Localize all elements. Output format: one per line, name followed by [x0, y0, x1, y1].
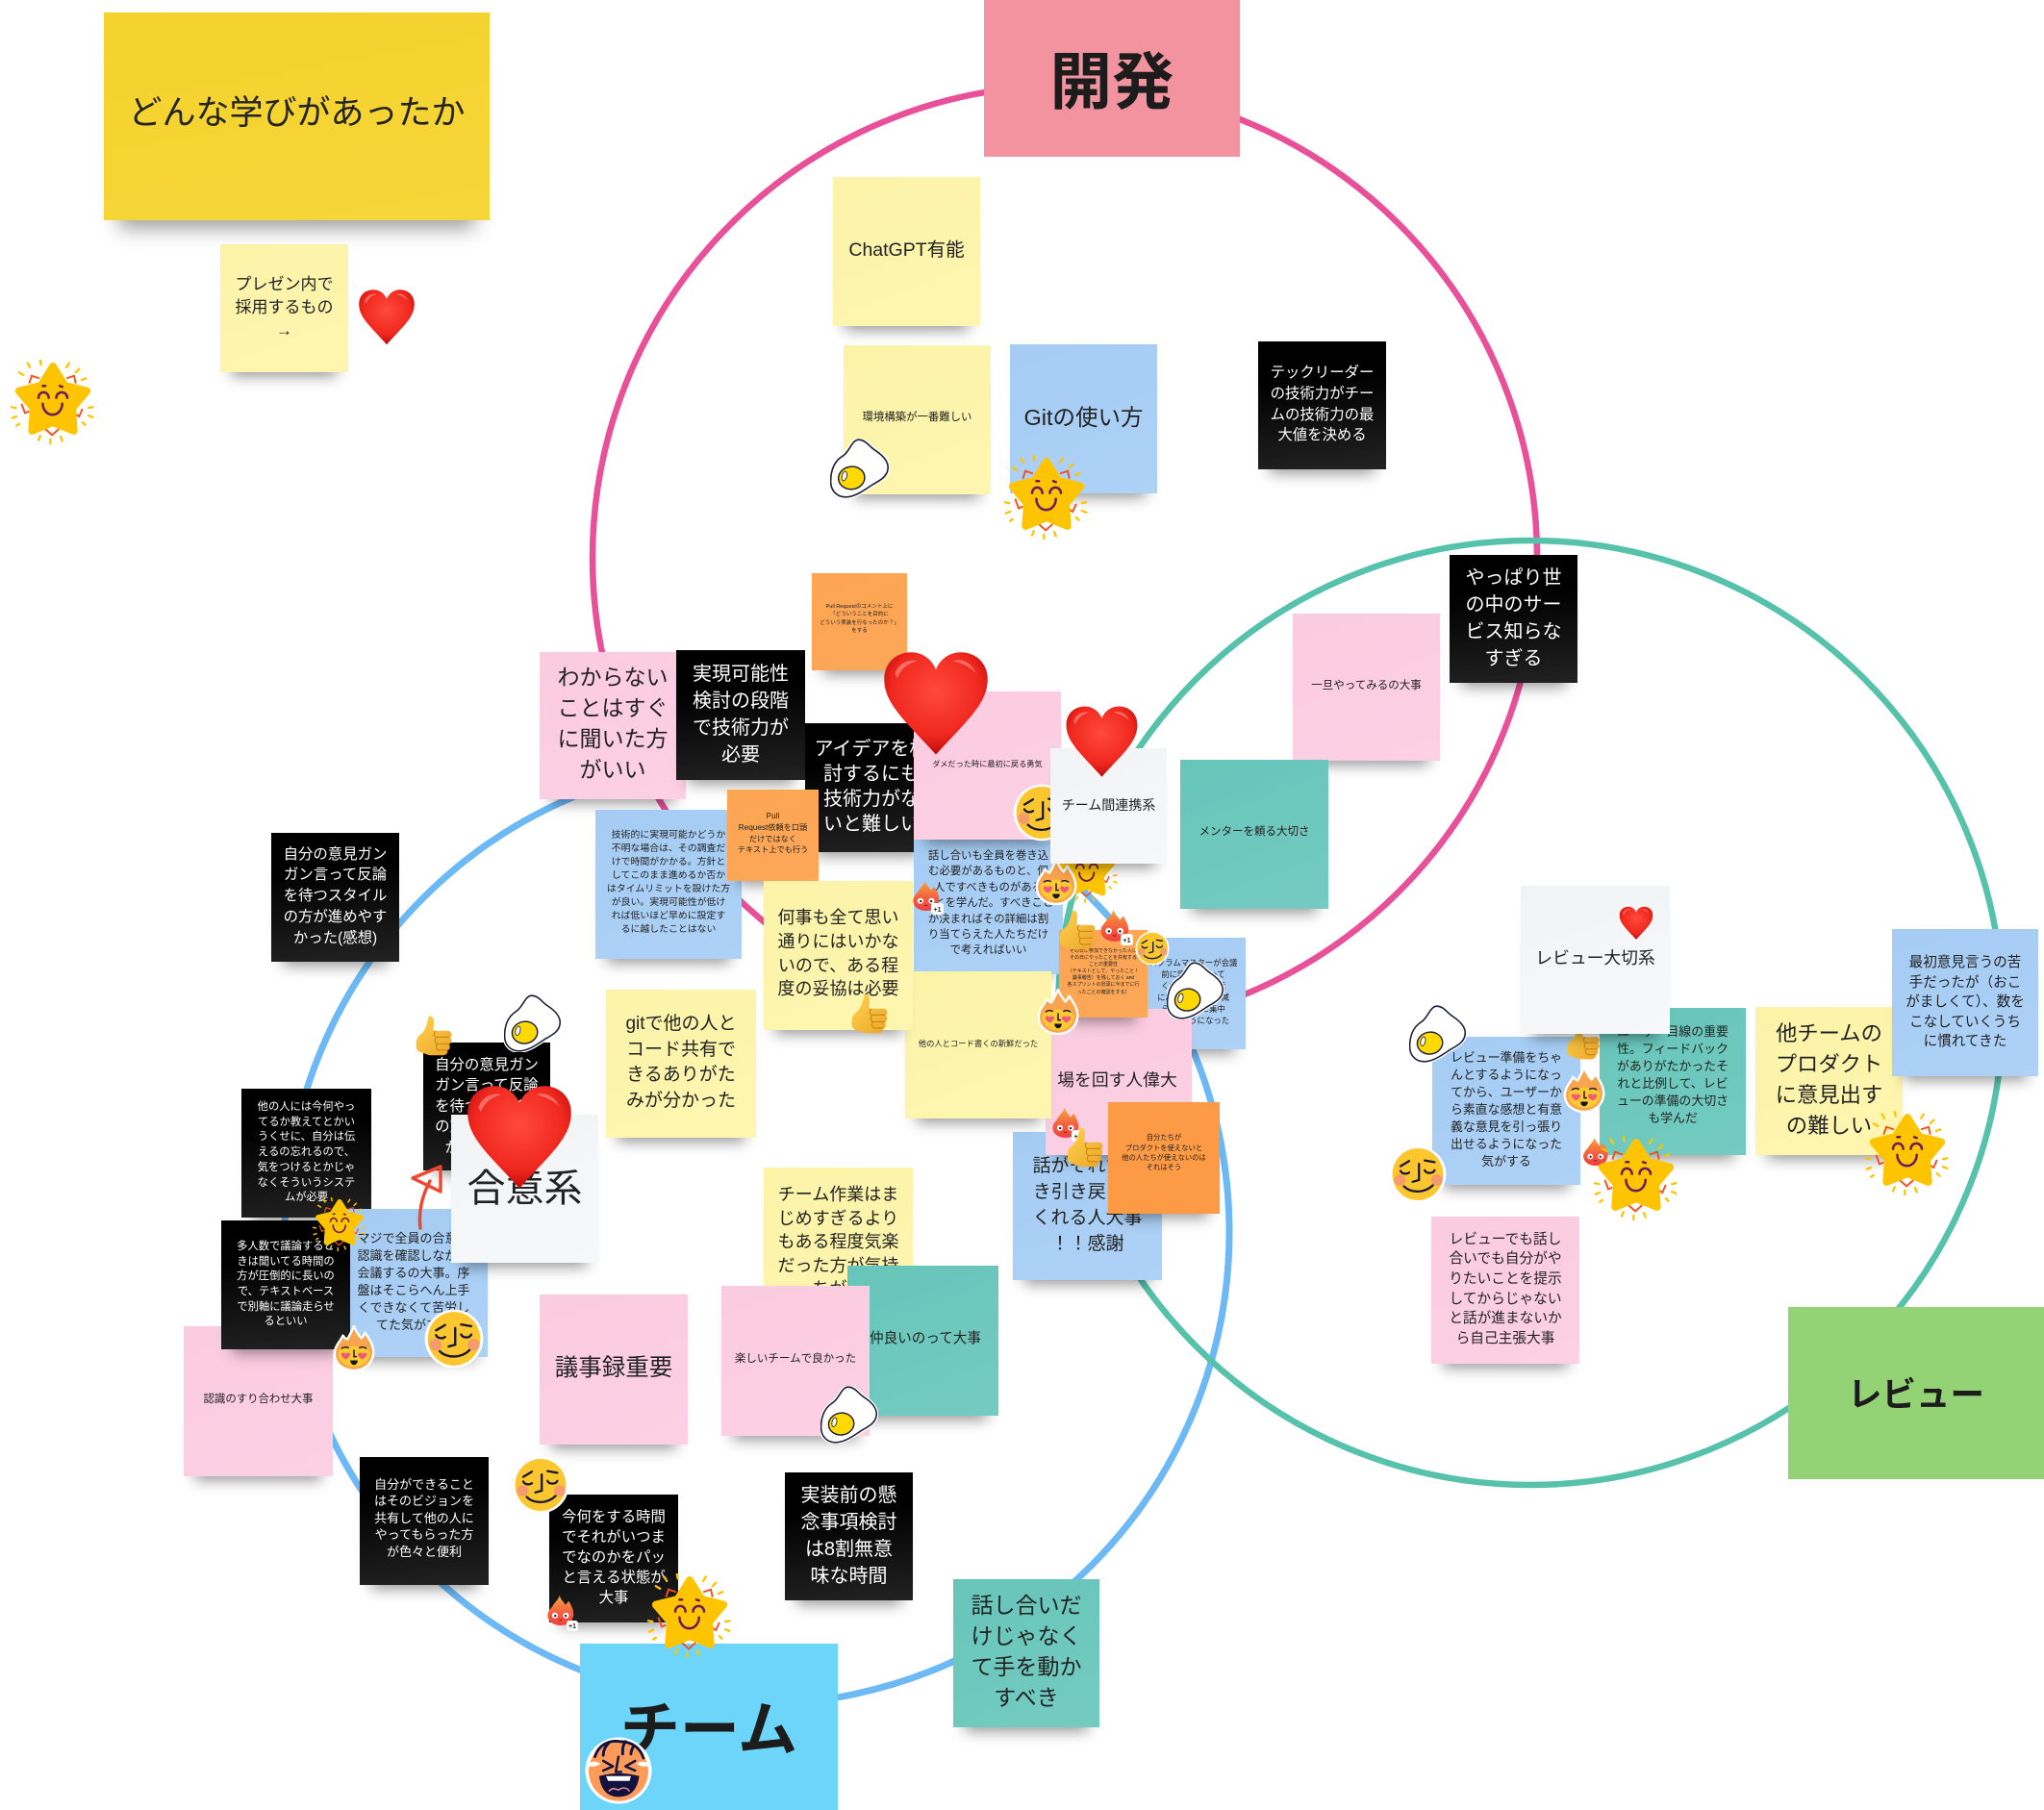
note: 最初意見言うの: がましくて）、数を: [1905, 994, 2025, 1010]
note: その日に参加: 議事報告）を残しておく and: [1072, 975, 1134, 981]
title: [104, 13, 490, 220]
note: 他の人には今何: 気をつけるとかじゃ: [258, 1162, 355, 1173]
note: 実装前の懸念: は8割無意: [805, 1539, 893, 1560]
note: やっぱり世の中: やっぱり世: [1466, 567, 1562, 589]
note: 話し合いだけ: [953, 1579, 1099, 1727]
note: 多人数で議論: 方が圧倒的に長いの: [237, 1270, 335, 1282]
icon: star: [1865, 1111, 1949, 1195]
note: チーム作業: もある程度気楽: [777, 1232, 898, 1251]
note: チーム作業: だった方が気持: [777, 1256, 898, 1275]
icon: egg: [1167, 962, 1224, 1019]
note: 他の人には今何: なくそういうシステ: [258, 1177, 355, 1189]
note: ユーザー目線: 性。フィードバック: [1617, 1041, 1729, 1056]
note: テックリーダー: テックリーダー: [1271, 365, 1374, 381]
note: 他の人には今何: ムが必要: [285, 1192, 328, 1203]
note: 一旦やってみる: 一旦やってみるの大事: [1311, 680, 1422, 691]
icon: fire +1: +1: [934, 907, 942, 914]
note: メンターを頼る: メンターを頼る大切さ: [1199, 826, 1310, 838]
note: gitで他の人と: きるありがた: [626, 1065, 736, 1085]
note: マジで全員の合意: 会議するの大事。序: [357, 1266, 469, 1280]
note: その日に参加: （テキストとして、やったこと！: [1068, 968, 1139, 974]
note: 環境構築: 環境構築が一番難しい: [863, 412, 972, 423]
note: スクラムマスター: スクラムマスターが会議: [1149, 958, 1237, 968]
icon: heart: [1620, 906, 1653, 940]
note: 多人数で議論: で、テキストベース: [238, 1286, 334, 1297]
icon: fire +1: [1100, 910, 1133, 945]
note: レビューでも話し合い: 合いでも自分がや: [1449, 1251, 1562, 1267]
icon: laughing face: [585, 1737, 652, 1804]
note: 認識のすり合わせ: [184, 1326, 333, 1476]
note: チーム作業: ちが楽: [812, 1279, 864, 1298]
icon: sleepy face: [425, 1310, 483, 1368]
note: 合意系: 合意系: [467, 1168, 583, 1210]
note: テックリーダー: 大値を決める: [1277, 427, 1367, 443]
label: チーム: チーム: [620, 1697, 797, 1764]
note: ダメだった時: ダメだった時に最初に戻る勇気: [932, 760, 1043, 768]
note: スクラムマスター: においても無駄を減: [1157, 993, 1229, 1002]
note: 楽しいチーム: 楽しいチームで良かった: [735, 1353, 856, 1365]
note: 自分の意見ガンガン 下: [423, 1043, 550, 1170]
note: レビュー準備: 気がする: [1481, 1154, 1531, 1169]
note: レビュー準備: てから、ユーザーか: [1451, 1085, 1562, 1099]
note: その日に参加: 各スプリントの冒頭に今までに行: [1067, 982, 1139, 988]
icon: egg: [820, 1386, 878, 1444]
note: アイデアを検討: いと難しい: [823, 814, 920, 835]
note: レビューでも話し合い: と話が進まないか: [1449, 1311, 1562, 1326]
note: 他の人には今何: てるか教えてとかい: [258, 1117, 355, 1128]
note: 話し合いだけ: けじゃなく: [972, 1623, 1081, 1648]
note: 話し合いも全員: が決まればその詳細は割: [928, 914, 1048, 925]
note: その日に参加: [1059, 930, 1148, 1018]
note: レビュー大切系: レビュー大切系: [1535, 948, 1655, 968]
note: Pull Request依頼: [727, 790, 819, 881]
note: PRコメント: [812, 573, 907, 670]
note: 自分の意見ガンガン 上: かった(感想): [293, 930, 377, 946]
note: マジで全員の合意: 盤はそこらへん上手: [357, 1283, 469, 1297]
note: 何事も全て: 通りにはいかな: [777, 932, 898, 951]
icon: fire +1: [913, 881, 944, 915]
icon: thumbs up: [1567, 1034, 1600, 1060]
icon: heart: [1066, 706, 1137, 777]
icon: sleepy face: [1014, 785, 1050, 841]
note: 他の人には今何: えるの忘れるので、: [258, 1146, 355, 1158]
note: 話し合いも全員: り当てらえた人たちだけ: [928, 929, 1048, 941]
note: 技術的に実現可能か: 技術的に実現可能かどうか: [612, 830, 725, 841]
note: その日に参加: その日に参加できなかった人に: [1070, 948, 1137, 954]
note: PRコメント: をする: [851, 628, 868, 634]
icon: sleepy face: [1393, 1148, 1447, 1200]
note: レビューでも話し合い: してからじゃない: [1449, 1291, 1562, 1306]
note: プレゼン内で採用するもの: [220, 244, 348, 372]
label: チーム: [580, 1644, 838, 1810]
note: 話がそれた時: [1013, 1132, 1162, 1280]
icon: sleepy face: [516, 1459, 568, 1512]
note: プレゼン内で採用するもの: プレゼン内で: [235, 275, 333, 293]
note: 他の人には今何: 他の人には今何やっ: [258, 1101, 355, 1113]
note: 自分ができること: 自分ができること: [374, 1477, 474, 1492]
icon: egg: [830, 439, 890, 498]
note: 話し合いも全員: む必要があるものと、個: [928, 866, 1048, 877]
icon: fire face: [1037, 989, 1079, 1035]
note: ChatGPT有能: [833, 177, 980, 326]
note: 実装前の懸念: [785, 1472, 913, 1600]
note: 場を回す人偉大: 場を回す人偉大: [1057, 1070, 1177, 1090]
note: ユーザー目線: ユーザー目線の重要: [1617, 1023, 1729, 1039]
note: 他の人には今何: [241, 1089, 371, 1218]
note: ユーザー目線: も学んだ: [1648, 1110, 1698, 1125]
note: 仲良いのって大事: [847, 1266, 998, 1416]
note: 実現可能性: 必要: [721, 744, 760, 766]
note: 今何をする時間: [549, 1495, 678, 1622]
note: テックリーダー: ムの技術力の最: [1271, 406, 1374, 423]
note: レビューでも話し合い: ら自己主張大事: [1456, 1331, 1554, 1346]
note: わからないこと: に聞いた方: [558, 726, 668, 751]
icon: star: [313, 1197, 366, 1251]
note: やっぱり世の中: ビス知らな: [1466, 621, 1562, 642]
note: 自分ができること: が色々と便利: [387, 1545, 462, 1559]
note: 自分の意見ガンガン 下: を待つスタイル: [435, 1098, 539, 1115]
note: スクラムマスター: できるようになった: [1157, 1016, 1229, 1025]
note: レビューでも話し合い: レビューでも話し: [1450, 1232, 1561, 1247]
icon: star: [11, 360, 94, 444]
note: 最初意見言うの: 最初意見言うの苦: [1909, 955, 2021, 970]
note: 他チームのプロダクト: に意見出す: [1776, 1083, 1882, 1107]
icon: fire +1: +1: [568, 1623, 576, 1630]
note: レビュー準備: [1432, 1037, 1580, 1185]
note: マジで全員の合意: くできなくて苦労し: [358, 1300, 469, 1315]
icon: star: [1059, 864, 1118, 903]
note: 自分ができること: はそのビジョンを: [374, 1494, 474, 1508]
note: 実現可能性: [676, 650, 805, 780]
note: 自分の意見ガンガン 上: を待つスタイル: [284, 888, 387, 904]
note: テックリーダー: [1258, 341, 1386, 469]
note: レビュー準備: ら素直な感想と有意: [1451, 1102, 1562, 1117]
note: アイデアを検討: 技術力がな: [823, 789, 920, 810]
note: Pull Request依頼: Request依頼を口頭: [739, 823, 807, 832]
note: 何事も全て: [764, 881, 913, 1030]
note: 自分の意見ガンガン 上: 自分の意見ガン: [284, 846, 387, 863]
note: gitで他の人と: コード共有で: [626, 1039, 736, 1060]
note: 話し合いも全員: で考えればいい: [950, 944, 1026, 956]
icon: fire face: [1564, 1070, 1604, 1113]
note: 多人数で議論: で別軸に議論走らせ: [237, 1301, 335, 1313]
note: 自分ができること: 共有して他の人に: [374, 1511, 474, 1525]
note: 他の人とコード: [905, 971, 1051, 1119]
note: 技術的に実現可能か: るに越したことはない: [621, 924, 716, 935]
note: 技術的に実現可能か: [595, 810, 742, 959]
note: 自分ができること: やってもらった方: [375, 1527, 473, 1542]
note: 最初意見言うの: こなしていくうち: [1909, 1015, 2021, 1030]
note: 自分の意見ガンガン 下: ガン言って反論: [436, 1077, 538, 1094]
note: マジで全員の合意: [340, 1209, 488, 1357]
icon: fire +1: [547, 1595, 578, 1631]
icon: egg: [504, 994, 561, 1052]
note: マジで全員の合意: 認識を確認しながら: [357, 1248, 469, 1263]
note: 自分たちが: 他の人たちが使えないのは: [1122, 1153, 1206, 1162]
note: 今何をする時間: と言える状態が: [562, 1570, 666, 1586]
note: わからないこと: がいい: [579, 757, 646, 782]
note: アイデアを検討: 討するにも: [823, 764, 920, 785]
note: 今何をする時間: でそれがいつま: [562, 1529, 666, 1546]
note: わからないこと: [540, 652, 686, 799]
note: 自分たちが: プロダクトを使えないと: [1125, 1144, 1202, 1152]
note: レビューでも話し合い: [1431, 1217, 1579, 1364]
note: ユーザー目線: がありがたかったそ: [1617, 1058, 1729, 1073]
note: 技術的に実現可能か: 不明な場合は、その調査だ: [612, 843, 725, 854]
note: gitで他の人と: みが分かった: [626, 1091, 736, 1110]
note: Pull Request依頼: だけではなく: [749, 835, 796, 842]
note: 今何をする時間: 大事: [599, 1590, 628, 1606]
note: 環境構築: [844, 345, 991, 494]
note: その日に参加: ことの重要性: [1089, 962, 1118, 968]
note: 話し合いも全員: 人ですべきものがある: [934, 882, 1043, 893]
icon: heart big: [467, 1086, 571, 1189]
note: 自分の意見ガンガン 下: の方が進めやす: [435, 1119, 539, 1135]
note: 話がそれた時: くれる人大事: [1032, 1208, 1143, 1228]
note: 自分たちが: それはそう: [1147, 1163, 1181, 1171]
note: 技術的に実現可能か: してこのまま進めるか否か: [612, 870, 725, 881]
note: 話し合いだけ: て手を動か: [972, 1654, 1081, 1679]
note: 仲良いのって大事: 仲良いのって大事: [870, 1331, 981, 1346]
note: Pull Request依頼: Pull: [767, 812, 779, 820]
icon: star: [1004, 455, 1088, 540]
note: 議事録重要: [540, 1295, 688, 1445]
note: やっぱり世の中: [1450, 555, 1577, 683]
arrow: red: [411, 1165, 442, 1230]
note: 何事も全て: 度の妥協は必要: [777, 979, 898, 998]
note: 認識のすり合わせ: 認識のすり合わせ大事: [204, 1394, 313, 1405]
note: 場を回す人偉大: [1046, 1009, 1192, 1155]
note: 実装前の懸念: 念事項検討: [800, 1512, 896, 1533]
label: 開発: [984, 0, 1240, 157]
note: 自分の意見ガンガン 上: [271, 833, 399, 962]
note: Pull Request依頼: テキスト上でも行う: [738, 845, 808, 854]
note: 最初意見言うの: 手だったが（おこ: [1909, 975, 2021, 991]
note: マジで全員の合意: マジで全員の合意、: [357, 1231, 469, 1245]
note: アイデアを検討: アイデアを検: [814, 739, 929, 760]
note: アイデアを検討: [805, 723, 933, 852]
note: レビュー準備: レビュー準備をちゃ: [1451, 1050, 1562, 1065]
note: 自分たちが: [1108, 1102, 1220, 1214]
note: その日に参加: その日にやったことを共有する: [1070, 955, 1137, 961]
icon: fire +1: [1052, 1108, 1082, 1142]
note: スクラムマスター: [1125, 938, 1246, 1049]
note: わからないこと: わからない: [558, 665, 668, 690]
note: プレゼン内で採用するもの: 採用するもの: [235, 298, 333, 316]
icon: fire face: [1035, 864, 1077, 905]
note: マジで全員の合意: てた気がする: [376, 1318, 451, 1332]
note: テックリーダー: の技術力がチー: [1271, 386, 1374, 402]
note: スクラムマスター: くれるので、会話: [1161, 981, 1225, 991]
note: 多人数で議論: るといい: [264, 1316, 308, 1327]
icon: thumbs up: [1068, 1127, 1102, 1168]
note: 話がそれた時: 話がそれたと: [1032, 1156, 1143, 1176]
note: gitで他の人と: gitで他の人と: [625, 1014, 737, 1034]
note: 技術的に実現可能か: が良い。実現可能性が低け: [612, 897, 725, 908]
note: 話がそれた時: ！！感謝: [1050, 1234, 1123, 1254]
note: 自分の意見ガンガン 下: かった(感想): [444, 1140, 529, 1156]
note: 議事録重要: 議事録重要: [555, 1355, 672, 1381]
note: ダメだった時: [914, 691, 1061, 840]
note: 話し合いも全員: [914, 837, 1063, 974]
note: 何事も全て: 何事も全て思い: [777, 908, 898, 927]
note: 他の人とコード: 他の人とコード書くの新鮮だった: [919, 1039, 1038, 1048]
note: スクラムマスター: らして議論に集中: [1161, 1004, 1225, 1014]
icon: heart big: [884, 652, 988, 754]
icon: heart: [359, 289, 415, 344]
note: 他の人には今何: うくせに、自分は伝: [258, 1131, 355, 1143]
note: チーム作業: [764, 1168, 913, 1317]
note: 実装前の懸念: 味な時間: [810, 1566, 887, 1587]
note: 実現可能性: で技術力が: [693, 717, 789, 739]
note: 実装前の懸念: 実装前の懸: [800, 1485, 896, 1506]
note: わからないこと: ことはすぐ: [558, 695, 668, 720]
note: やっぱり世の中: すぎる: [1485, 648, 1543, 669]
note: ユーザー目線: ューの準備の大切さ: [1617, 1093, 1729, 1108]
note: 話し合いだけ: 話し合いだ: [972, 1593, 1081, 1618]
note: Gitの使い方: [1010, 344, 1157, 493]
note: スクラムマスター: 前に議題を作って: [1161, 969, 1225, 979]
icon: fire +1: +1: [1074, 1134, 1082, 1141]
note: 技術的に実現可能か: けで時間がかかる。方針と: [612, 857, 725, 867]
icon: thumbs up: [416, 1016, 452, 1056]
note: 自分ができること: [360, 1457, 489, 1585]
note: 最初意見言うの: に慣れてきた: [1924, 1034, 2006, 1049]
note: レビュー準備: 出せるようになった: [1451, 1137, 1562, 1151]
icon: star: [1594, 1136, 1678, 1220]
note: 話し合いも全員: 話し合いも全員を巻き込: [928, 850, 1048, 862]
note: チーム間連携系: [1050, 748, 1167, 864]
note: チーム間連携系: チーム間連携系: [1062, 797, 1155, 813]
note: 実現可能性: 実現可能性: [693, 664, 789, 685]
note: 自分の意見ガンガン 上: ガン言って反論: [284, 867, 387, 883]
note: プレゼン内で採用するもの: →: [276, 321, 292, 339]
note: 他チームのプロダクト: プロダクト: [1776, 1052, 1882, 1076]
note: 自分の意見ガンガン 上: の方が進めやす: [284, 909, 387, 925]
note: 技術的に実現可能か: れば低いほど早めに設定す: [612, 911, 725, 921]
note: 自分の意見ガンガン 下: 自分の意見ガン: [435, 1057, 539, 1073]
note: 多人数で議論: 多人数で議論すると: [237, 1241, 335, 1252]
icon: egg: [1409, 1005, 1467, 1063]
note: ユーザー目線: れと比例して、レビ: [1618, 1075, 1728, 1091]
note: その日に参加: ったことの確認をする）: [1077, 990, 1129, 995]
label: レビュー: [1788, 1307, 2044, 1479]
note: 実現可能性: 検討の段階: [693, 691, 789, 712]
note: 自分たちが: 自分たちが: [1147, 1133, 1181, 1142]
icon: thumbs up: [852, 994, 887, 1033]
note: 何事も全て: いので、ある程: [778, 956, 898, 975]
note: ユーザー目線: [1600, 1008, 1746, 1155]
note: チーム作業: チーム作業はま: [778, 1185, 898, 1204]
title: どんな学びがあったか: [128, 94, 466, 131]
note: ChatGPT有能: ChatGPT有能: [848, 239, 965, 261]
note: Gitの使い方: Gitの使い方: [1023, 404, 1144, 429]
note: 他チームのプロダクト: の難しい: [1786, 1114, 1872, 1138]
note: チーム作業: じめすぎるより: [778, 1209, 898, 1228]
note: PRコメント: どういう実装を行なったのか？」: [820, 619, 899, 625]
label: 開発: 開発: [1049, 48, 1173, 117]
note: 楽しいチーム: [721, 1286, 870, 1436]
note: 他チームのプロダクト: 他チームの: [1776, 1021, 1882, 1045]
note: 他チームのプロダクト: [1755, 1007, 1903, 1155]
icon: fire: [1583, 1137, 1608, 1166]
note: PRコメント: 「どういうことを目的に: [830, 612, 889, 617]
note: 最初意見言うの: [1892, 929, 2038, 1076]
note: やっぱり世の中: の中のサー: [1466, 594, 1562, 616]
icon: star: [647, 1573, 731, 1658]
note: レビューでも話し合い: りたいことを提示: [1449, 1271, 1562, 1287]
label: レビュー: レビュー: [1848, 1375, 1984, 1414]
note: 話がそれた時: き引き戻して: [1033, 1182, 1142, 1202]
note: レビュー大切系: [1521, 886, 1670, 1034]
note: 今何をする時間: 今何をする時間: [562, 1509, 666, 1525]
note: 今何をする時間: でなのかをパッ: [562, 1549, 666, 1566]
note: レビュー準備: 義な意見を引っ張り: [1451, 1119, 1562, 1134]
note: 合意系: [451, 1115, 598, 1263]
note: レビュー準備: んとするようになっ: [1451, 1068, 1562, 1082]
note: 話し合いも全員: ことを学んだ。すべきこと: [923, 897, 1053, 909]
icon: fire +1: +1: [1123, 938, 1131, 944]
icon: fire face: [333, 1325, 375, 1370]
note: 多人数で議論: きは聞いてる時間の: [237, 1256, 335, 1268]
note: 多人数で議論: [221, 1220, 350, 1349]
icon: sleepy face small: [1135, 932, 1170, 966]
note: 一旦やってみる: [1293, 614, 1440, 761]
icon: thumbs up: [1060, 910, 1095, 950]
note: gitで他の人と: [606, 990, 756, 1138]
note: 話し合いだけ: すべき: [994, 1685, 1059, 1710]
note: 技術的に実現可能か: はタイムリミットを設けた方: [607, 884, 730, 894]
note: メンターを頼る: [1180, 760, 1328, 909]
note: PRコメント: Pull Requestのコメント上に: [826, 604, 893, 610]
